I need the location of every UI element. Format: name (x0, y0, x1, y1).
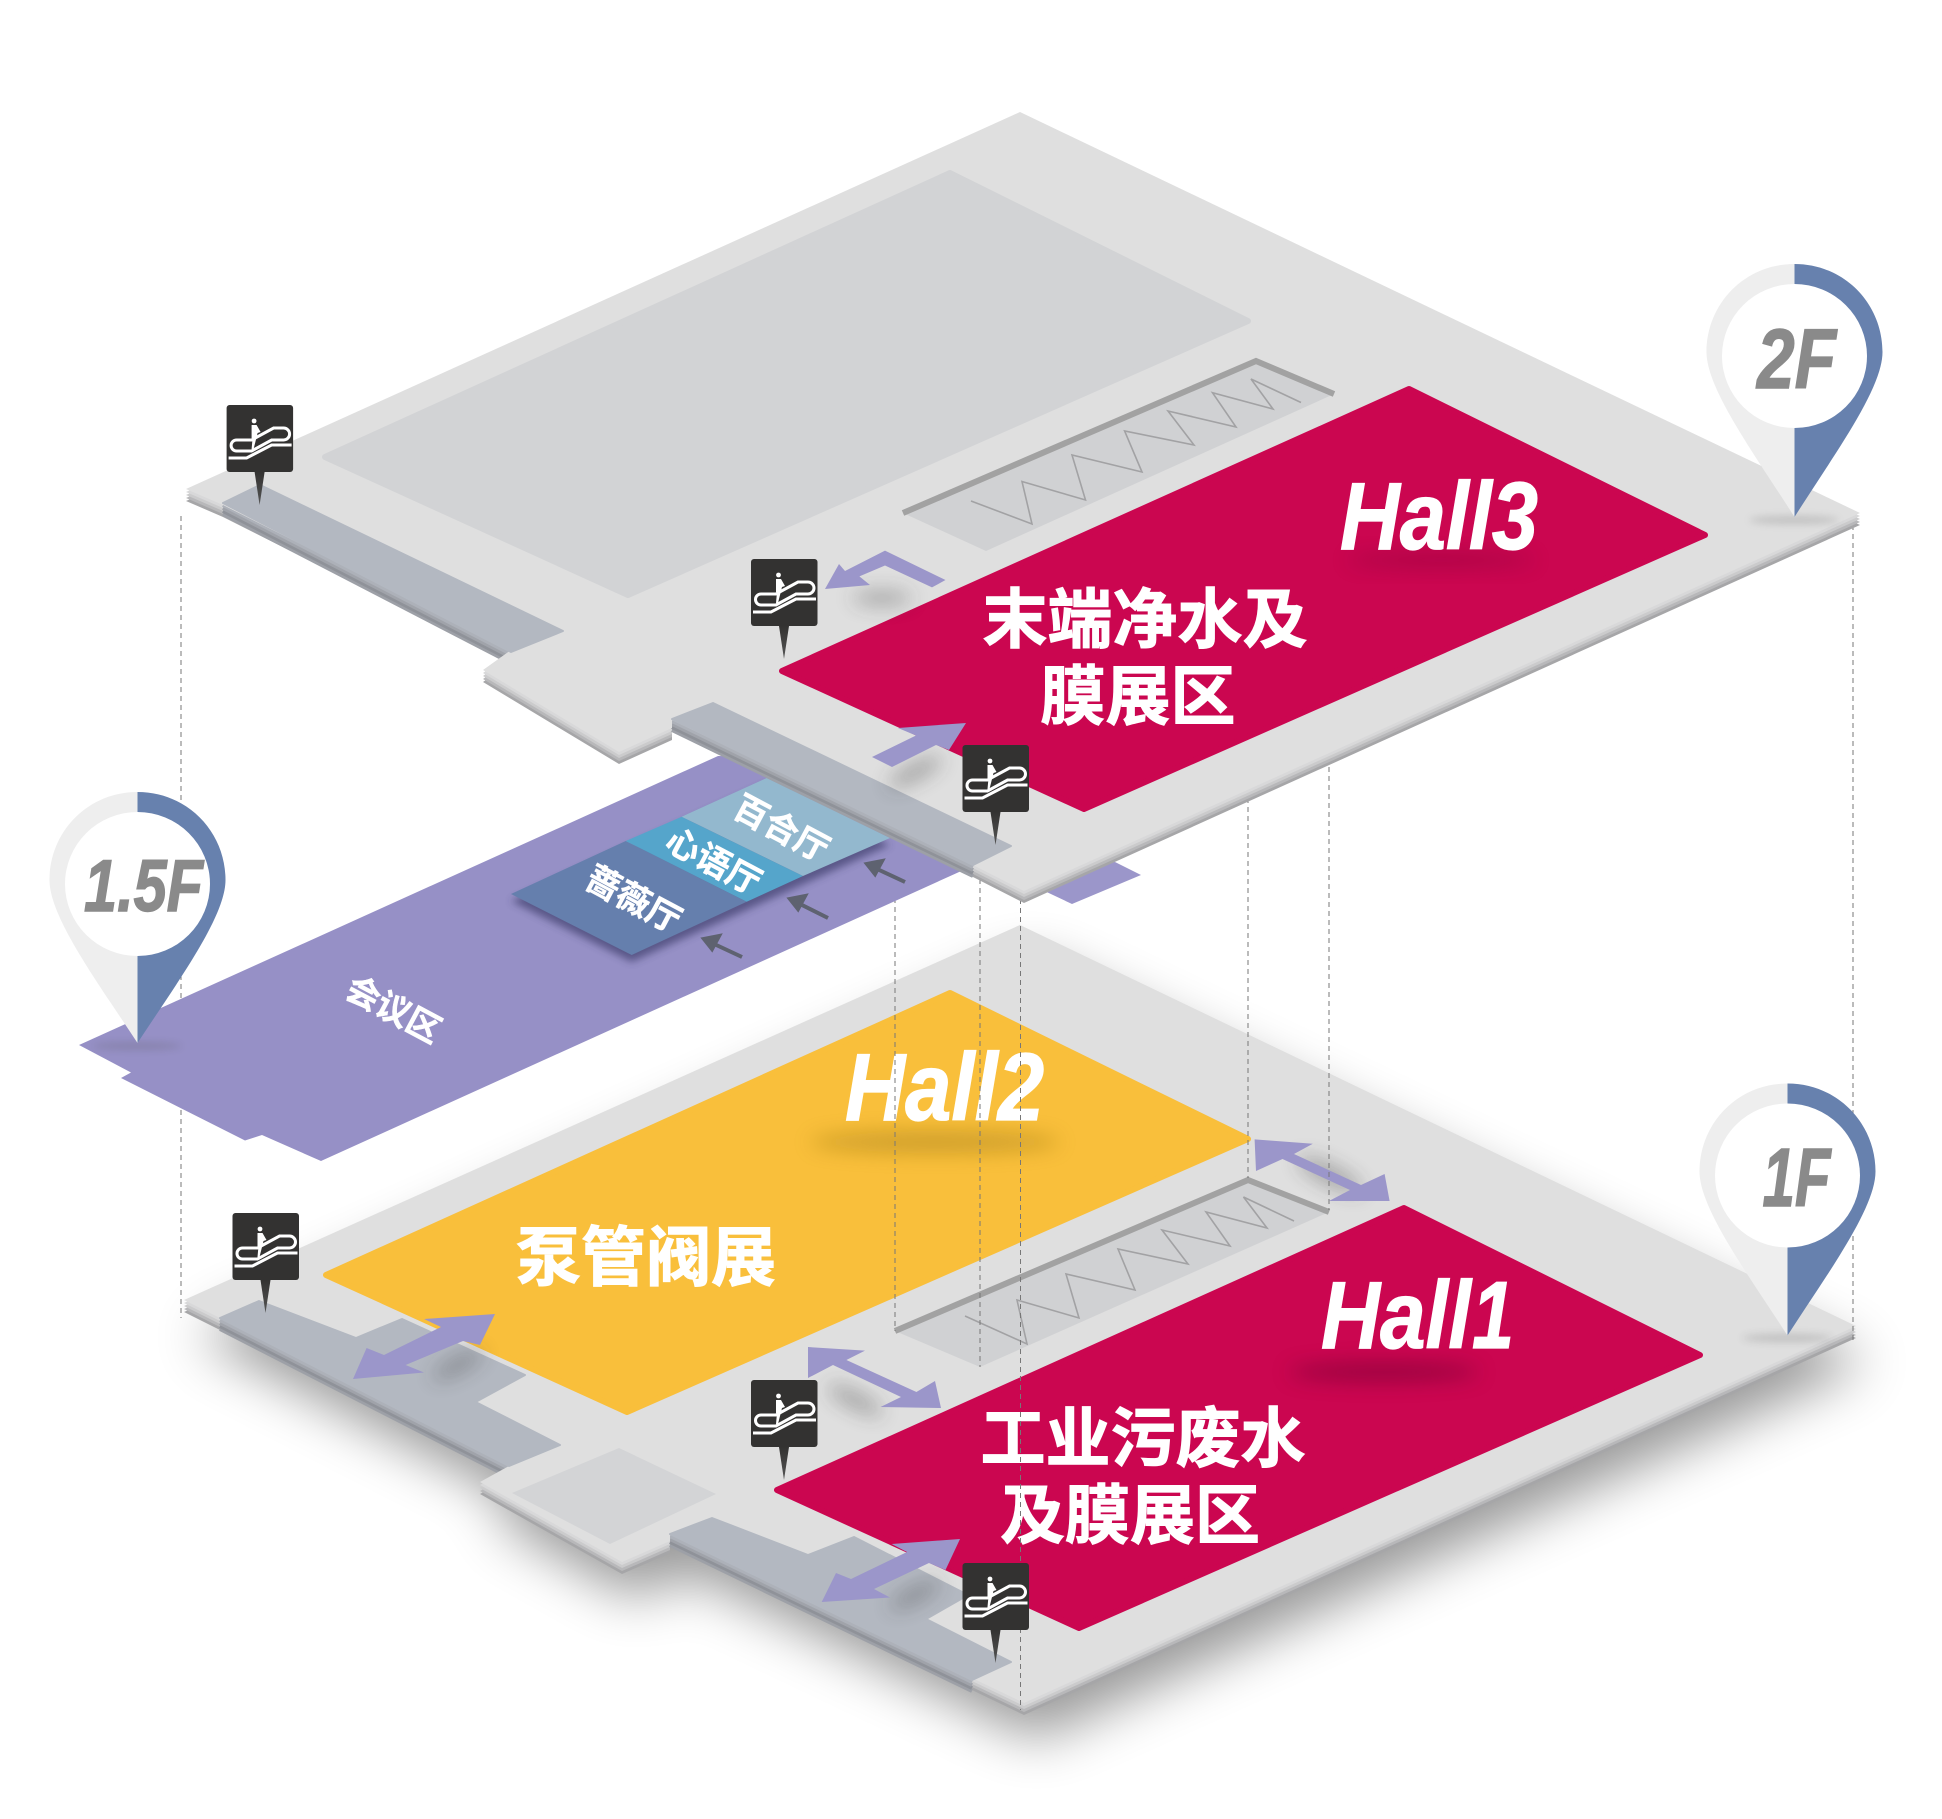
escalator sign 1F centre (751, 1380, 818, 1480)
small entrance arrow 2 (790, 896, 828, 918)
meeting zone label: 会议区 (339, 970, 447, 1051)
label 百合厅: 百合厅 (727, 789, 835, 870)
Hall2 text shadow (810, 1131, 1060, 1153)
floor 2F (186, 112, 1860, 903)
escalator area 1F (895, 1180, 1329, 1367)
floor 2F right stair strip (672, 703, 1011, 865)
Hall3 zone (782, 389, 1705, 809)
Hall3 title: Hall3 (1340, 463, 1538, 570)
escalator sign 2F centre (751, 559, 818, 659)
floor pin 2F (1706, 264, 1882, 517)
Hall1 zone (777, 1208, 1700, 1628)
label 蔷薇厅: 蔷薇厅 (579, 860, 687, 941)
arrow shadows 1F (430, 1152, 1366, 1613)
Hall1 text shadow (1289, 1363, 1479, 1381)
Hall3 text shadow (1346, 554, 1536, 566)
room 蔷薇厅 (511, 841, 747, 955)
Hall2 subtitle: 泵管阀展 (516, 1221, 776, 1294)
floor 2F left stair strip (223, 485, 563, 652)
conference floor (79, 756, 990, 1161)
Hall3 subtitle line 1: 末端净水及 (982, 583, 1308, 656)
floor 2F plate edge (186, 115, 1860, 903)
escalator sign 1F left (232, 1213, 299, 1313)
turning arrow to escalator (825, 551, 946, 589)
floor 1F (184, 925, 1868, 1739)
floor 1F plate surface (184, 925, 1856, 1703)
floor 1F left strip edge (220, 1320, 509, 1477)
floor pin 1F: 1F (1762, 1131, 1832, 1224)
dashed connector lines (181, 516, 1853, 1710)
escalator sign 1F bottom (962, 1563, 1029, 1663)
floor 2F plate surface (186, 112, 1860, 891)
floor 1F right strip edge (670, 1536, 972, 1691)
floor 1F left stair strip (220, 1301, 560, 1466)
floor 2F left strip edge (223, 505, 511, 663)
floor 2F right strip edge (672, 721, 973, 876)
arrow shadows 2F (852, 592, 945, 792)
floor 2F inner grey area (325, 173, 1248, 595)
pin shadows (92, 516, 1839, 1342)
Hall1 title: Hall (1321, 1262, 1473, 1369)
Hall2 zone (326, 993, 1248, 1412)
label 心语厅: 心语厅 (659, 822, 767, 903)
floor 1F right stair strip (670, 1518, 1011, 1680)
floor 1F drop shadow (196, 961, 1868, 1739)
arrow up to Hall3 (872, 723, 966, 767)
escalator sign 2F bottom (962, 745, 1029, 845)
floor 1.5F (79, 756, 1141, 1161)
floor pin 2F: 2F (1755, 312, 1838, 406)
double arrow between Hall2 and Hall1 right (1255, 1139, 1390, 1201)
small entrance arrow 1 (867, 861, 905, 882)
floor pin 1.5F (50, 792, 226, 1043)
Hall1 title: 1 (1472, 1262, 1514, 1369)
escalator sign 2F left (227, 405, 293, 505)
escalator area 2F (903, 361, 1334, 551)
Hall1 subtitle line 2: 及膜展区 (1000, 1479, 1260, 1552)
room 百合厅 (682, 778, 890, 876)
floor pin 1.5F: 1.5F (84, 846, 205, 927)
floor 1F plate edge (184, 928, 1856, 1715)
floor 1F lobby square (512, 1448, 716, 1544)
floor pin 1F (1700, 1084, 1876, 1336)
double arrow lower strip (822, 1539, 960, 1602)
room shadows (511, 785, 890, 962)
Hall3 subtitle line 2: 膜展区 (1040, 660, 1236, 733)
Hall1 subtitle line 1: 工业污废水 (980, 1402, 1306, 1475)
conference floor right end (1000, 862, 1141, 904)
double arrow centre (808, 1347, 941, 1408)
Hall2 title: Hall2 (845, 1034, 1044, 1141)
double arrow left strip (353, 1314, 495, 1379)
room 心语厅 (626, 817, 803, 902)
small entrance arrow 3 (704, 936, 742, 957)
